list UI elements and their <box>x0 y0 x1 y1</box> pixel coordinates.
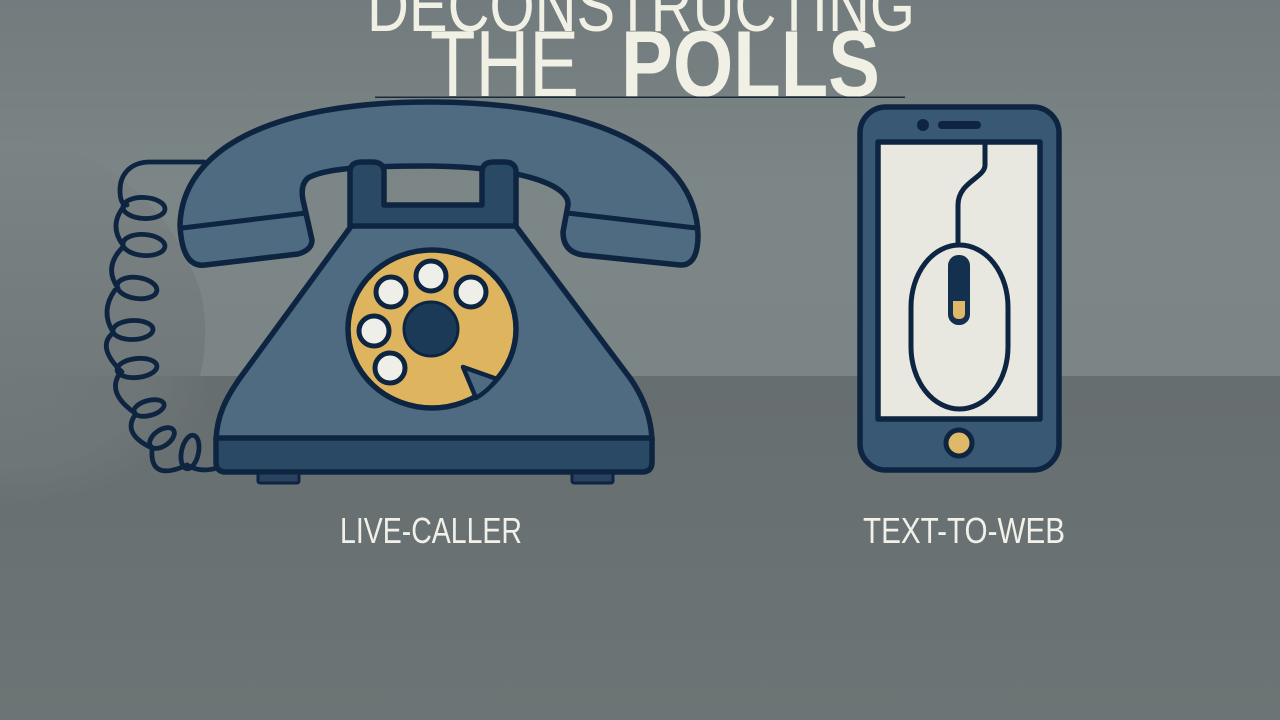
background floor left shade <box>0 376 216 507</box>
camera and speaker <box>917 119 981 131</box>
title <box>367 0 915 116</box>
mouse wheel highlight <box>953 301 965 319</box>
background wall <box>0 0 1280 376</box>
rotary dial <box>348 250 516 408</box>
background floor <box>0 376 1280 720</box>
label: live-caller: LIVE-CALLER <box>340 510 522 551</box>
label: text-to-web: TEXT-TO-WEB <box>863 510 1065 551</box>
handset seams <box>182 213 696 228</box>
phone body <box>216 225 652 440</box>
background shadow circle <box>0 141 205 376</box>
dial finger holes <box>359 261 486 383</box>
dial hub <box>404 302 458 356</box>
dial stopper <box>463 367 497 398</box>
phone case <box>860 107 1059 470</box>
coiled cord <box>106 162 217 471</box>
mouse cable <box>958 144 985 256</box>
phone screen <box>878 142 1040 419</box>
phone feet <box>258 473 613 483</box>
handset <box>180 102 698 265</box>
home button <box>946 430 972 456</box>
title: THE <box>430 11 579 116</box>
title: POLLS <box>621 11 880 116</box>
title rule <box>375 96 905 98</box>
icon: smartphone <box>860 107 1059 470</box>
phone base <box>216 438 652 472</box>
mouse wheel <box>948 255 970 325</box>
icon: rotary telephone <box>106 102 698 483</box>
mouse body <box>911 245 1008 409</box>
cradle <box>350 162 516 226</box>
